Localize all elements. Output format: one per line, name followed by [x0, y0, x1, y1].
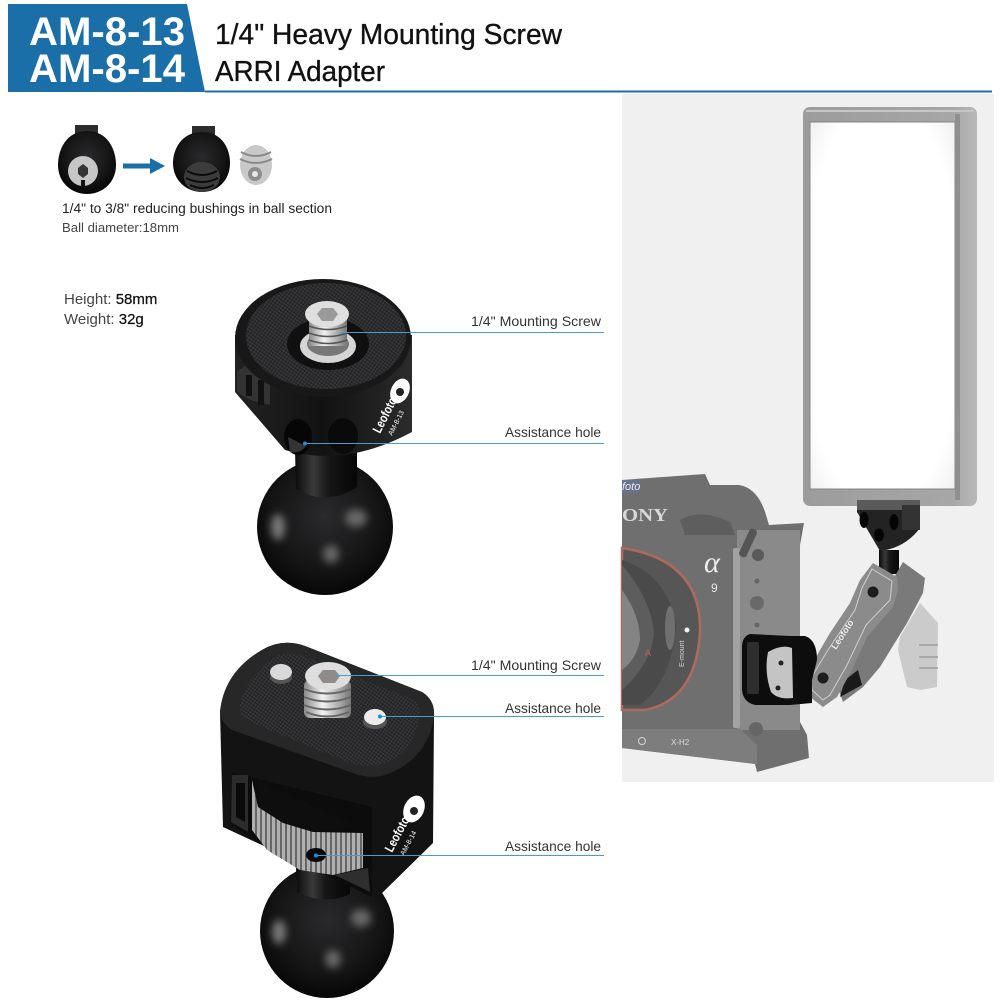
knurled wheel: [252, 780, 363, 875]
logo: Leofoto: [369, 395, 400, 435]
header banner: [8, 4, 205, 92]
arm plates: [805, 562, 925, 707]
header banner: AM-8-13: [29, 10, 185, 54]
icon: ball with threaded hole: [173, 126, 230, 192]
camera body: ONY: [622, 505, 668, 525]
knob body: [235, 335, 412, 456]
black clamp: [742, 634, 817, 705]
icon: reducing bushing: [240, 145, 272, 185]
clamp body: [220, 643, 434, 898]
locating pins: [270, 664, 387, 729]
front plate: [805, 563, 898, 707]
logo: [381, 792, 429, 857]
ball: [257, 459, 393, 595]
header banner: AM-8-14: [29, 47, 186, 91]
light panel: [803, 107, 977, 506]
mounting screw: [304, 662, 351, 718]
header rule: [205, 90, 992, 92]
arrow: [123, 158, 165, 174]
title: ARRI Adapter: [215, 56, 385, 88]
specifications: Weight: 32g: [64, 311, 144, 328]
neck: [295, 450, 357, 498]
callout: assistance hole wheel AM-8-14: [314, 838, 604, 858]
camera lens: [622, 548, 700, 710]
logo: [369, 375, 414, 437]
camera body: X-H2: [671, 738, 690, 747]
panel: application photo: [622, 94, 994, 782]
product: AM-8-13: [235, 279, 414, 595]
camera body: [622, 474, 809, 772]
callout: assistance hole AM-8-13: Assistance hole: [505, 424, 601, 440]
callout: mounting screw AM-8-14: 1/4" Mounting Screw: [471, 657, 602, 673]
ball mount under light: [857, 500, 920, 605]
logo: AM-8-13: [388, 410, 406, 437]
logo: AM-8-14: [400, 830, 418, 857]
bushing caption: Ball diameter:18mm: [62, 221, 179, 235]
camera body: foto: [622, 481, 640, 493]
bushing caption: [62, 201, 332, 235]
camera lens: E-mount: [679, 640, 686, 667]
product: AM-8-14: [220, 643, 434, 998]
logo: Leofoto: [381, 814, 413, 854]
bushing caption: 1/4" to 3/8" reducing bushings in ball section: [62, 201, 332, 216]
slot: [230, 773, 372, 897]
arm plates: Leofoto: [829, 618, 856, 651]
lever clamp: [898, 603, 938, 690]
callout: assistance hole AM-8-13: [303, 424, 604, 446]
title: 1/4" Heavy Mounting Screw: [215, 19, 563, 51]
back plate: [835, 562, 925, 702]
ball: [260, 864, 394, 998]
camera body: α: [704, 546, 721, 579]
specifications: [64, 291, 157, 328]
title: [215, 19, 563, 88]
callout: mounting screw AM-8-13: 1/4" Mounting Screw: [471, 313, 602, 329]
mounting screw: [287, 301, 369, 370]
bushing diagram: [58, 125, 272, 194]
callout: assistance hole top AM-8-14: [378, 700, 604, 718]
icon: ball with bushing: [58, 125, 116, 194]
specifications: Height: 58mm: [64, 291, 157, 308]
knurled top: [235, 279, 411, 397]
callout: assistance hole top AM-8-14: Assistance hole: [505, 700, 601, 716]
callout: assistance hole wheel AM-8-14: Assistance hole: [505, 838, 601, 854]
camera lens: A: [645, 648, 651, 658]
camera body: 9: [711, 581, 718, 595]
